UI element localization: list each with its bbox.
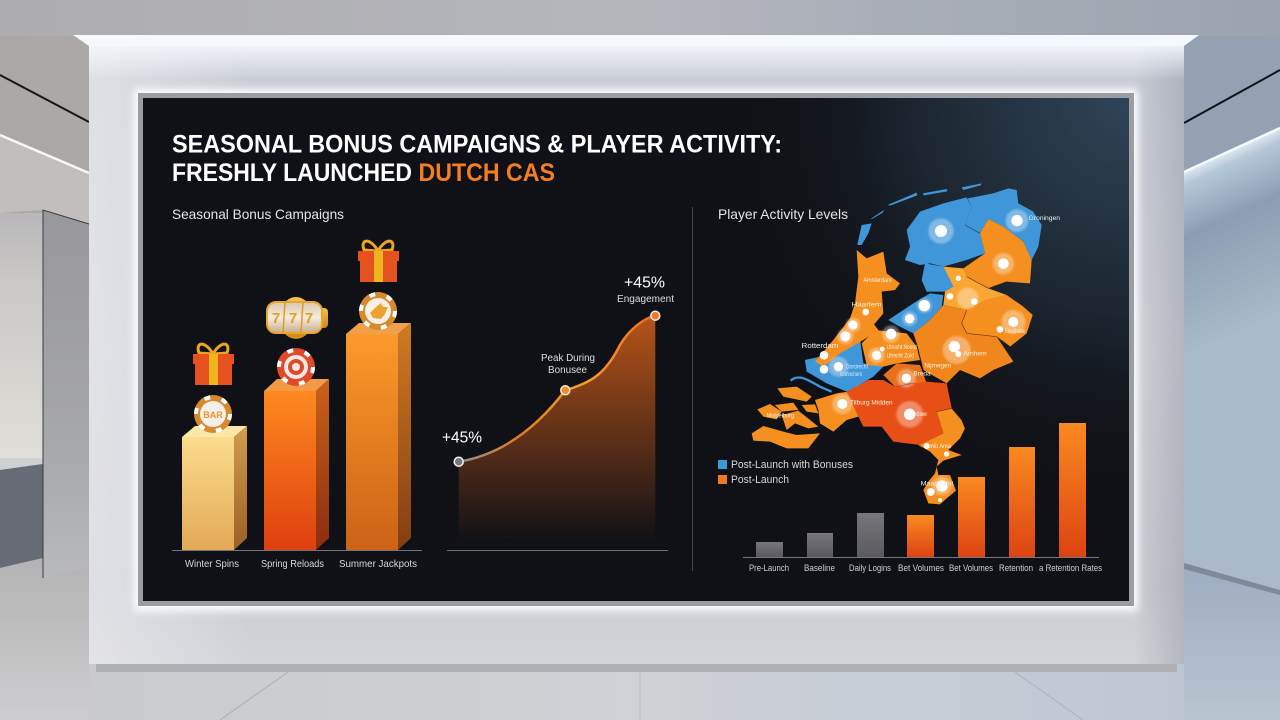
city labels: Rotterdam [802,341,838,350]
icon: gift summer [358,241,399,282]
divider [692,207,694,571]
city labels: Utrecht Noord [887,344,917,351]
ceiling accent lines [0,70,1280,173]
map regions [752,183,1042,504]
icon: slot machine [267,297,328,339]
icon: chip winter: BAR [203,410,223,420]
metric labels: Bet Volumes [949,563,993,574]
legend: post-launch: Post-Launch [731,474,789,486]
activity hotspots [820,209,1028,502]
label: end value: +45% [624,274,665,292]
city labels: Maastricht [921,480,953,487]
legend [718,459,853,486]
city labels: Haarlem [852,301,882,308]
bar: winter spins [182,426,247,550]
data point: end [651,311,660,320]
bar labels: Summer Jackpots [339,558,417,570]
title [172,130,782,187]
left wall panel [43,210,89,578]
bar chart: player metrics [743,423,1102,574]
metric labels: Pre-Launch [749,563,789,574]
title: SEASONAL BONUS CAMPAIGNS & PLAYER ACTIVITY: [172,130,782,158]
bar labels: Winter Spins [185,558,239,570]
screen [138,93,1134,606]
title: DUTCH CAS [418,159,555,187]
metric labels: Baseline [804,563,835,574]
city labels: Arnhem [963,351,987,358]
metric labels [749,563,1102,574]
city labels: Amsterdam [863,277,892,284]
metric labels: Daily Logins [849,563,891,574]
bar labels [185,558,417,570]
label: peak during bonuses: Peak During [541,352,595,364]
metric labels: a Retention Rates [1039,563,1102,574]
label: peak during bonuses: Bonusee [548,364,587,376]
heading: seasonal bonus campaigns: Seasonal Bonus Campaigns [172,206,344,222]
label: engagement: Engagement [617,293,674,305]
title: FRESHLY LAUNCHED [172,159,412,187]
metric labels: Bet Volumes [898,563,944,574]
city labels: Nijmegen [924,362,951,369]
city labels: Gorinchem [840,371,862,378]
city labels: Venlo Area [924,443,951,450]
label: start value: +45% [442,430,482,446]
city labels: Enschede [1005,328,1025,335]
icon: chip spring [277,348,315,386]
label: peak during bonuses [541,352,595,376]
heading: player activity levels: Player Activity Levels [718,206,848,222]
line chart: engagement [442,274,674,550]
icon: slot machine: 7 [289,310,297,327]
metric labels: Retention [999,563,1033,574]
city labels: Tilburg Midden [850,399,893,406]
city labels: Dordrecht [846,364,868,371]
bar labels: Spring Reloads [261,558,324,570]
map: netherlands activity [752,183,1060,504]
city labels: Eindhoven [912,411,927,418]
display wall [73,35,1199,672]
city labels: Breda [913,371,931,378]
data point: start [454,457,463,466]
icon: chip summer [359,292,397,330]
data point: peak [561,386,570,395]
city labels [767,215,1060,487]
bar: spring reloads [264,379,329,550]
icon: gift winter [193,344,234,385]
city labels: Groningen [1029,215,1060,222]
city labels: Utrecht Zuid [887,352,914,359]
city labels: Middelburg [767,413,794,420]
bar chart: seasonal campaigns [172,323,422,570]
icon: slot machine: 7 [272,310,280,327]
legend: post-launch with bonuses: Post-Launch with Bonuses [731,459,853,471]
icon: slot machine: 7 [305,310,313,327]
icon: chip winter [194,395,232,433]
bar: summer jackpots [346,323,411,550]
